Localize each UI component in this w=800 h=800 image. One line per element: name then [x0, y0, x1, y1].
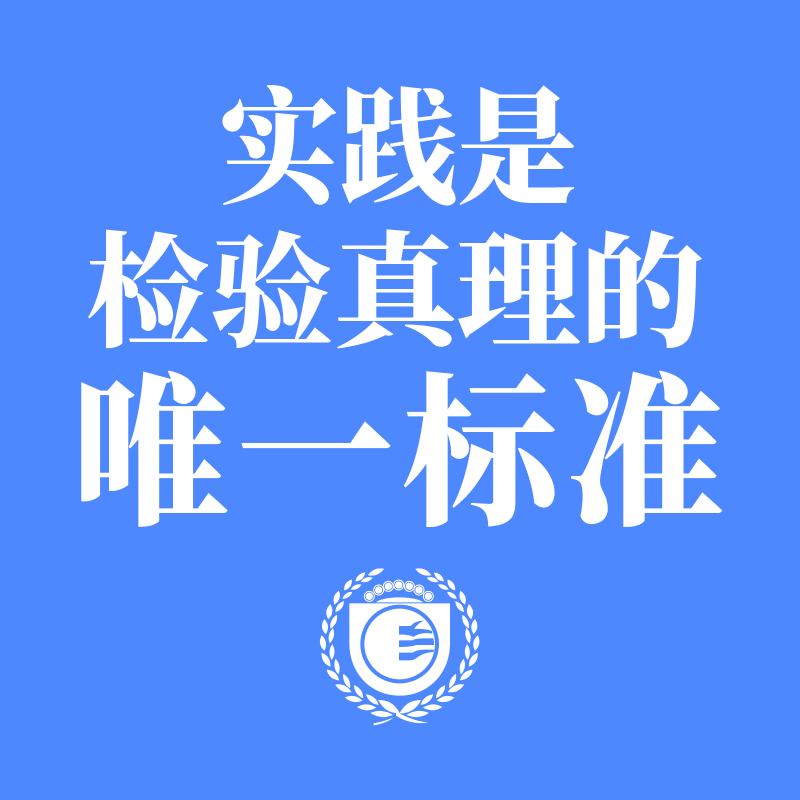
heading line 2: 检验真理的 — [86, 226, 704, 363]
wreath: crossed stems — [373, 711, 428, 725]
heading line 1: 实践是 — [220, 81, 577, 220]
crown — [364, 580, 433, 602]
heading line 3: 唯一标准 — [72, 367, 732, 548]
wreath: left branch — [319, 566, 402, 718]
icon: emblem with laurel wreath and shield — [320, 568, 480, 726]
wreath: right branch — [397, 566, 481, 718]
shield — [349, 603, 450, 696]
open book mark — [399, 621, 434, 660]
